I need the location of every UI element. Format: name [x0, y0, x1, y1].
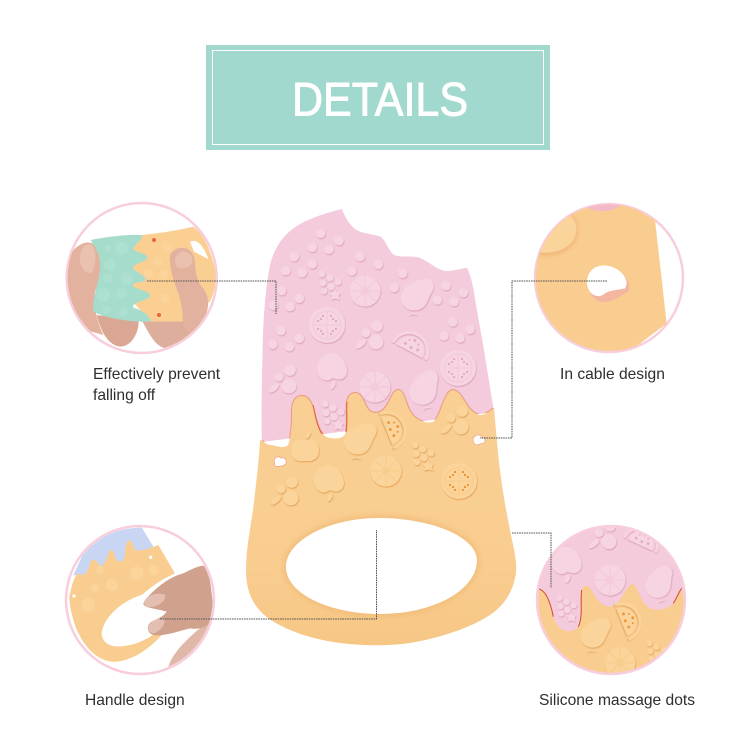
pink fruit reliefs — [267, 271, 476, 430]
orange fruit reliefs — [269, 405, 477, 506]
leader line: in cable design — [480, 281, 607, 438]
label: handle design: Handle design — [85, 692, 185, 709]
pink massage dots — [268, 228, 475, 352]
label: effectively prevent falling off: falling off — [93, 387, 156, 404]
teether product — [246, 209, 516, 645]
leader line: effectively prevent falling off — [147, 281, 276, 314]
detail circle: in cable design — [532, 202, 683, 355]
detail circle: handle design — [66, 526, 217, 674]
leader line: silicone massage dots — [512, 533, 551, 588]
detail circle: silicone massage dots — [536, 524, 686, 676]
label: in cable design: In cable design — [560, 366, 665, 383]
title text: DETAILS — [292, 72, 468, 126]
pink popsicle top — [262, 209, 494, 442]
label: silicone massage dots: Silicone massage dots — [539, 692, 695, 709]
leader line: handle design — [160, 530, 376, 619]
cable holes — [274, 435, 485, 466]
detail circle: effectively prevent falling off — [66, 203, 217, 353]
title banner — [206, 45, 550, 150]
orange lower body with handle — [246, 390, 516, 645]
label: effectively prevent falling off: Effectively prevent — [93, 366, 221, 383]
